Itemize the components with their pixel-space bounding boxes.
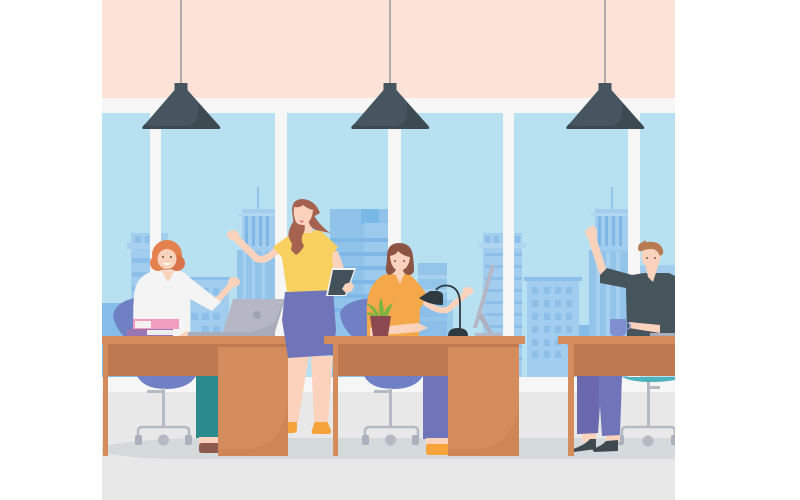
- desk: left: [102, 336, 295, 456]
- window sky: [102, 113, 675, 378]
- laptop: [188, 299, 285, 336]
- desk: middle: [324, 336, 525, 456]
- chair: middle: [340, 298, 423, 446]
- office illustration: [102, 0, 675, 500]
- person: standing woman with tablet: [227, 199, 356, 434]
- desk: right: [558, 336, 675, 456]
- potted plant: [367, 299, 392, 336]
- chair: left: [113, 298, 196, 446]
- person: seated woman in orange: [367, 243, 474, 455]
- monitor: [473, 265, 502, 336]
- desk lamp: [419, 286, 468, 336]
- rug: [102, 438, 675, 459]
- window frame: [102, 98, 675, 392]
- ceiling: [102, 0, 675, 98]
- chair: right: [618, 377, 676, 446]
- stack of books: [127, 319, 179, 336]
- pendant lamps: [142, 0, 644, 129]
- city skyline: [102, 187, 675, 378]
- person: seated woman with red hair: [133, 240, 240, 453]
- coffee mug: [610, 319, 630, 336]
- floor: [102, 392, 675, 500]
- person: man waving: [573, 225, 675, 452]
